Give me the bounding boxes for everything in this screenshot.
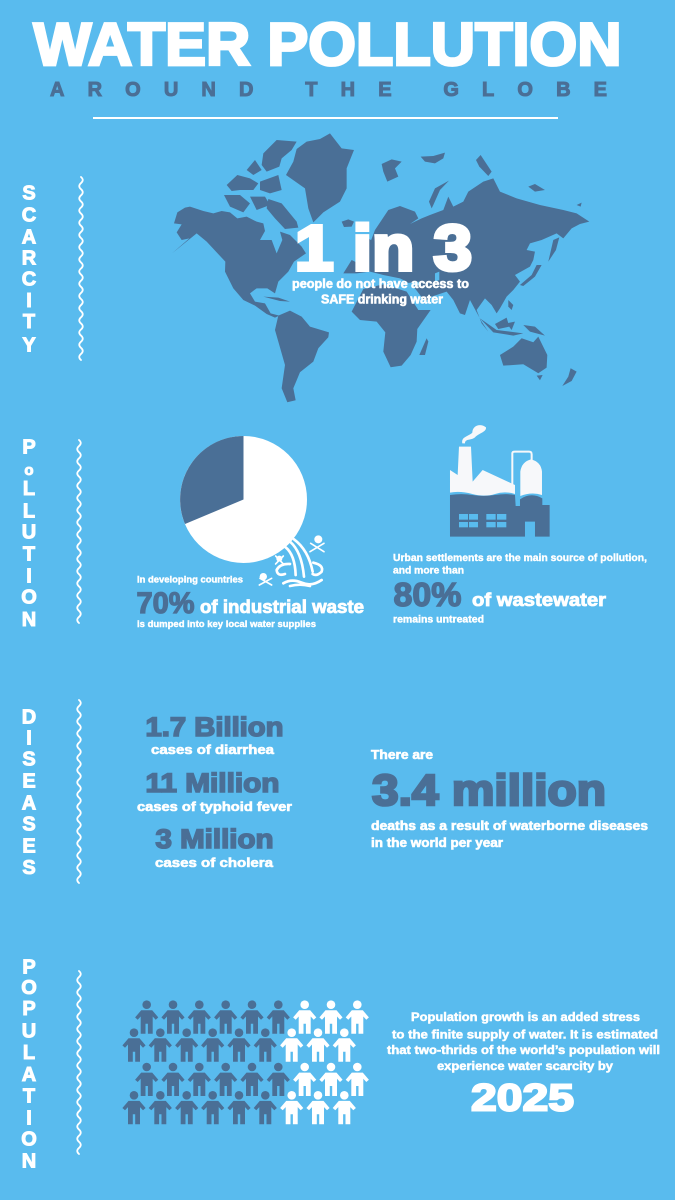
subtitle: AROUND THE GLOBE [50, 79, 607, 101]
section label: diseases: D [22, 706, 36, 728]
section label: population: N [22, 1150, 36, 1172]
section label: diseases: E [22, 836, 36, 858]
stat: diarrhea: cases of diarrhea [151, 743, 275, 757]
section label: population: O [21, 1129, 37, 1151]
text: 70 percent: 70% [136, 587, 194, 620]
section label: pollution: o [24, 462, 34, 479]
stat: waterborne deaths [371, 748, 648, 850]
panel: pollution [21, 425, 647, 631]
section label: scarcity [22, 182, 37, 357]
panel: diseases [22, 700, 648, 883]
wavy divider: population [77, 971, 81, 1154]
section label: population: O [21, 977, 37, 999]
icon: factory [450, 425, 550, 537]
section label: scarcity: C [22, 205, 36, 227]
text: 80 percent: remains untreated [393, 614, 484, 626]
section label: population: U [22, 1021, 36, 1043]
section label: diseases: S [22, 814, 36, 836]
text: population growth: that two-thrids of the world’s population will [387, 1045, 660, 1057]
section label: population: P [22, 956, 36, 978]
text: 70 percent: of industrial waste [200, 597, 364, 617]
section label: population [21, 956, 37, 1172]
text: 80 percent: Urban settlements are the main source of pollution, [393, 552, 647, 564]
stat: waterborne deaths: deaths as a result of waterborne diseases [371, 819, 648, 833]
stat: diarrhea: 1.7 Billion [146, 712, 284, 742]
section label: pollution: P [22, 436, 36, 458]
title: WATER POLLUTION [34, 11, 622, 78]
text: population growth [387, 1012, 660, 1073]
stat: typhoid fever: cases of typhoid fever [137, 800, 292, 814]
title rule [93, 117, 558, 119]
stat: typhoid fever [137, 768, 292, 814]
section label: scarcity: Y [22, 335, 36, 357]
section label: pollution: T [23, 544, 35, 566]
section label: diseases: S [22, 857, 36, 879]
section label: pollution: L [23, 478, 35, 500]
stat: diarrhea [146, 712, 284, 757]
section label: scarcity: S [22, 182, 36, 204]
stat: waterborne deaths: in the world per year [371, 836, 503, 850]
stat: cholera: cases of cholera [155, 856, 274, 870]
section label: diseases: I [26, 727, 32, 749]
stat: cholera: 3 Million [156, 824, 274, 854]
stat: cholera [155, 824, 274, 870]
wavy divider: diseases [77, 700, 81, 883]
section label: diseases: S [22, 749, 36, 771]
text: 70 percent: In developing countries [137, 574, 243, 584]
text: population growth: Population growth is an added stress [411, 1012, 640, 1024]
section label: pollution [21, 436, 37, 631]
stat: 1 in 3: 1 in 3 [295, 212, 472, 284]
stat: 2025: 2025 [471, 1078, 574, 1120]
section label: scarcity: A [22, 226, 36, 248]
stat: waterborne deaths: 3.4 million [372, 766, 606, 815]
pictogram: dark people [122, 1000, 290, 1124]
text: 80 percent: 80% [394, 576, 462, 613]
stat: waterborne deaths: There are [371, 748, 433, 762]
icon: polluted water outflow [259, 535, 324, 586]
panel: population [21, 956, 660, 1172]
section label: scarcity: R [22, 248, 37, 270]
section label: diseases [22, 706, 36, 879]
text: 80 percent: of wastewater [472, 590, 606, 610]
section label: scarcity: C [22, 269, 36, 291]
section label: pollution: U [22, 521, 36, 543]
caption: 1 in 3: SAFE drinking water [321, 292, 443, 306]
section label: population: I [26, 1107, 32, 1129]
wavy divider: pollution [77, 440, 81, 623]
caption: 1 in 3: people do not have access to [292, 277, 469, 291]
wavy divider: scarcity [79, 177, 83, 360]
section label: pollution: N [22, 609, 36, 631]
world map [172, 133, 589, 402]
text: 80 percent: and more than [393, 564, 464, 576]
section label: population: P [22, 998, 36, 1020]
pictogram: white people [280, 1000, 369, 1124]
text: population growth: experience water scarcity by [437, 1061, 614, 1073]
pie chart: 70% [180, 436, 307, 563]
section label: population: A [22, 1064, 36, 1086]
section label: population: L [23, 1042, 35, 1064]
caption: 1 in 3 [292, 277, 469, 306]
section label: scarcity: T [23, 311, 35, 333]
text: 70 percent: is dumped into key local water supplies [137, 619, 316, 630]
panel: scarcity [22, 133, 589, 402]
stat: typhoid fever: 11 Million [146, 768, 280, 798]
section label: pollution: L [23, 500, 35, 522]
section label: pollution: O [21, 586, 37, 608]
text: 80 percent [393, 552, 647, 626]
text: 70 percent [136, 574, 364, 630]
text: population growth: to the finite supply of water. It is estimated [392, 1030, 658, 1042]
section label: pollution: I [26, 565, 32, 587]
section label: diseases: E [22, 770, 36, 792]
section label: diseases: A [22, 792, 36, 814]
section label: population: T [23, 1085, 35, 1107]
section label: scarcity: I [26, 290, 32, 312]
